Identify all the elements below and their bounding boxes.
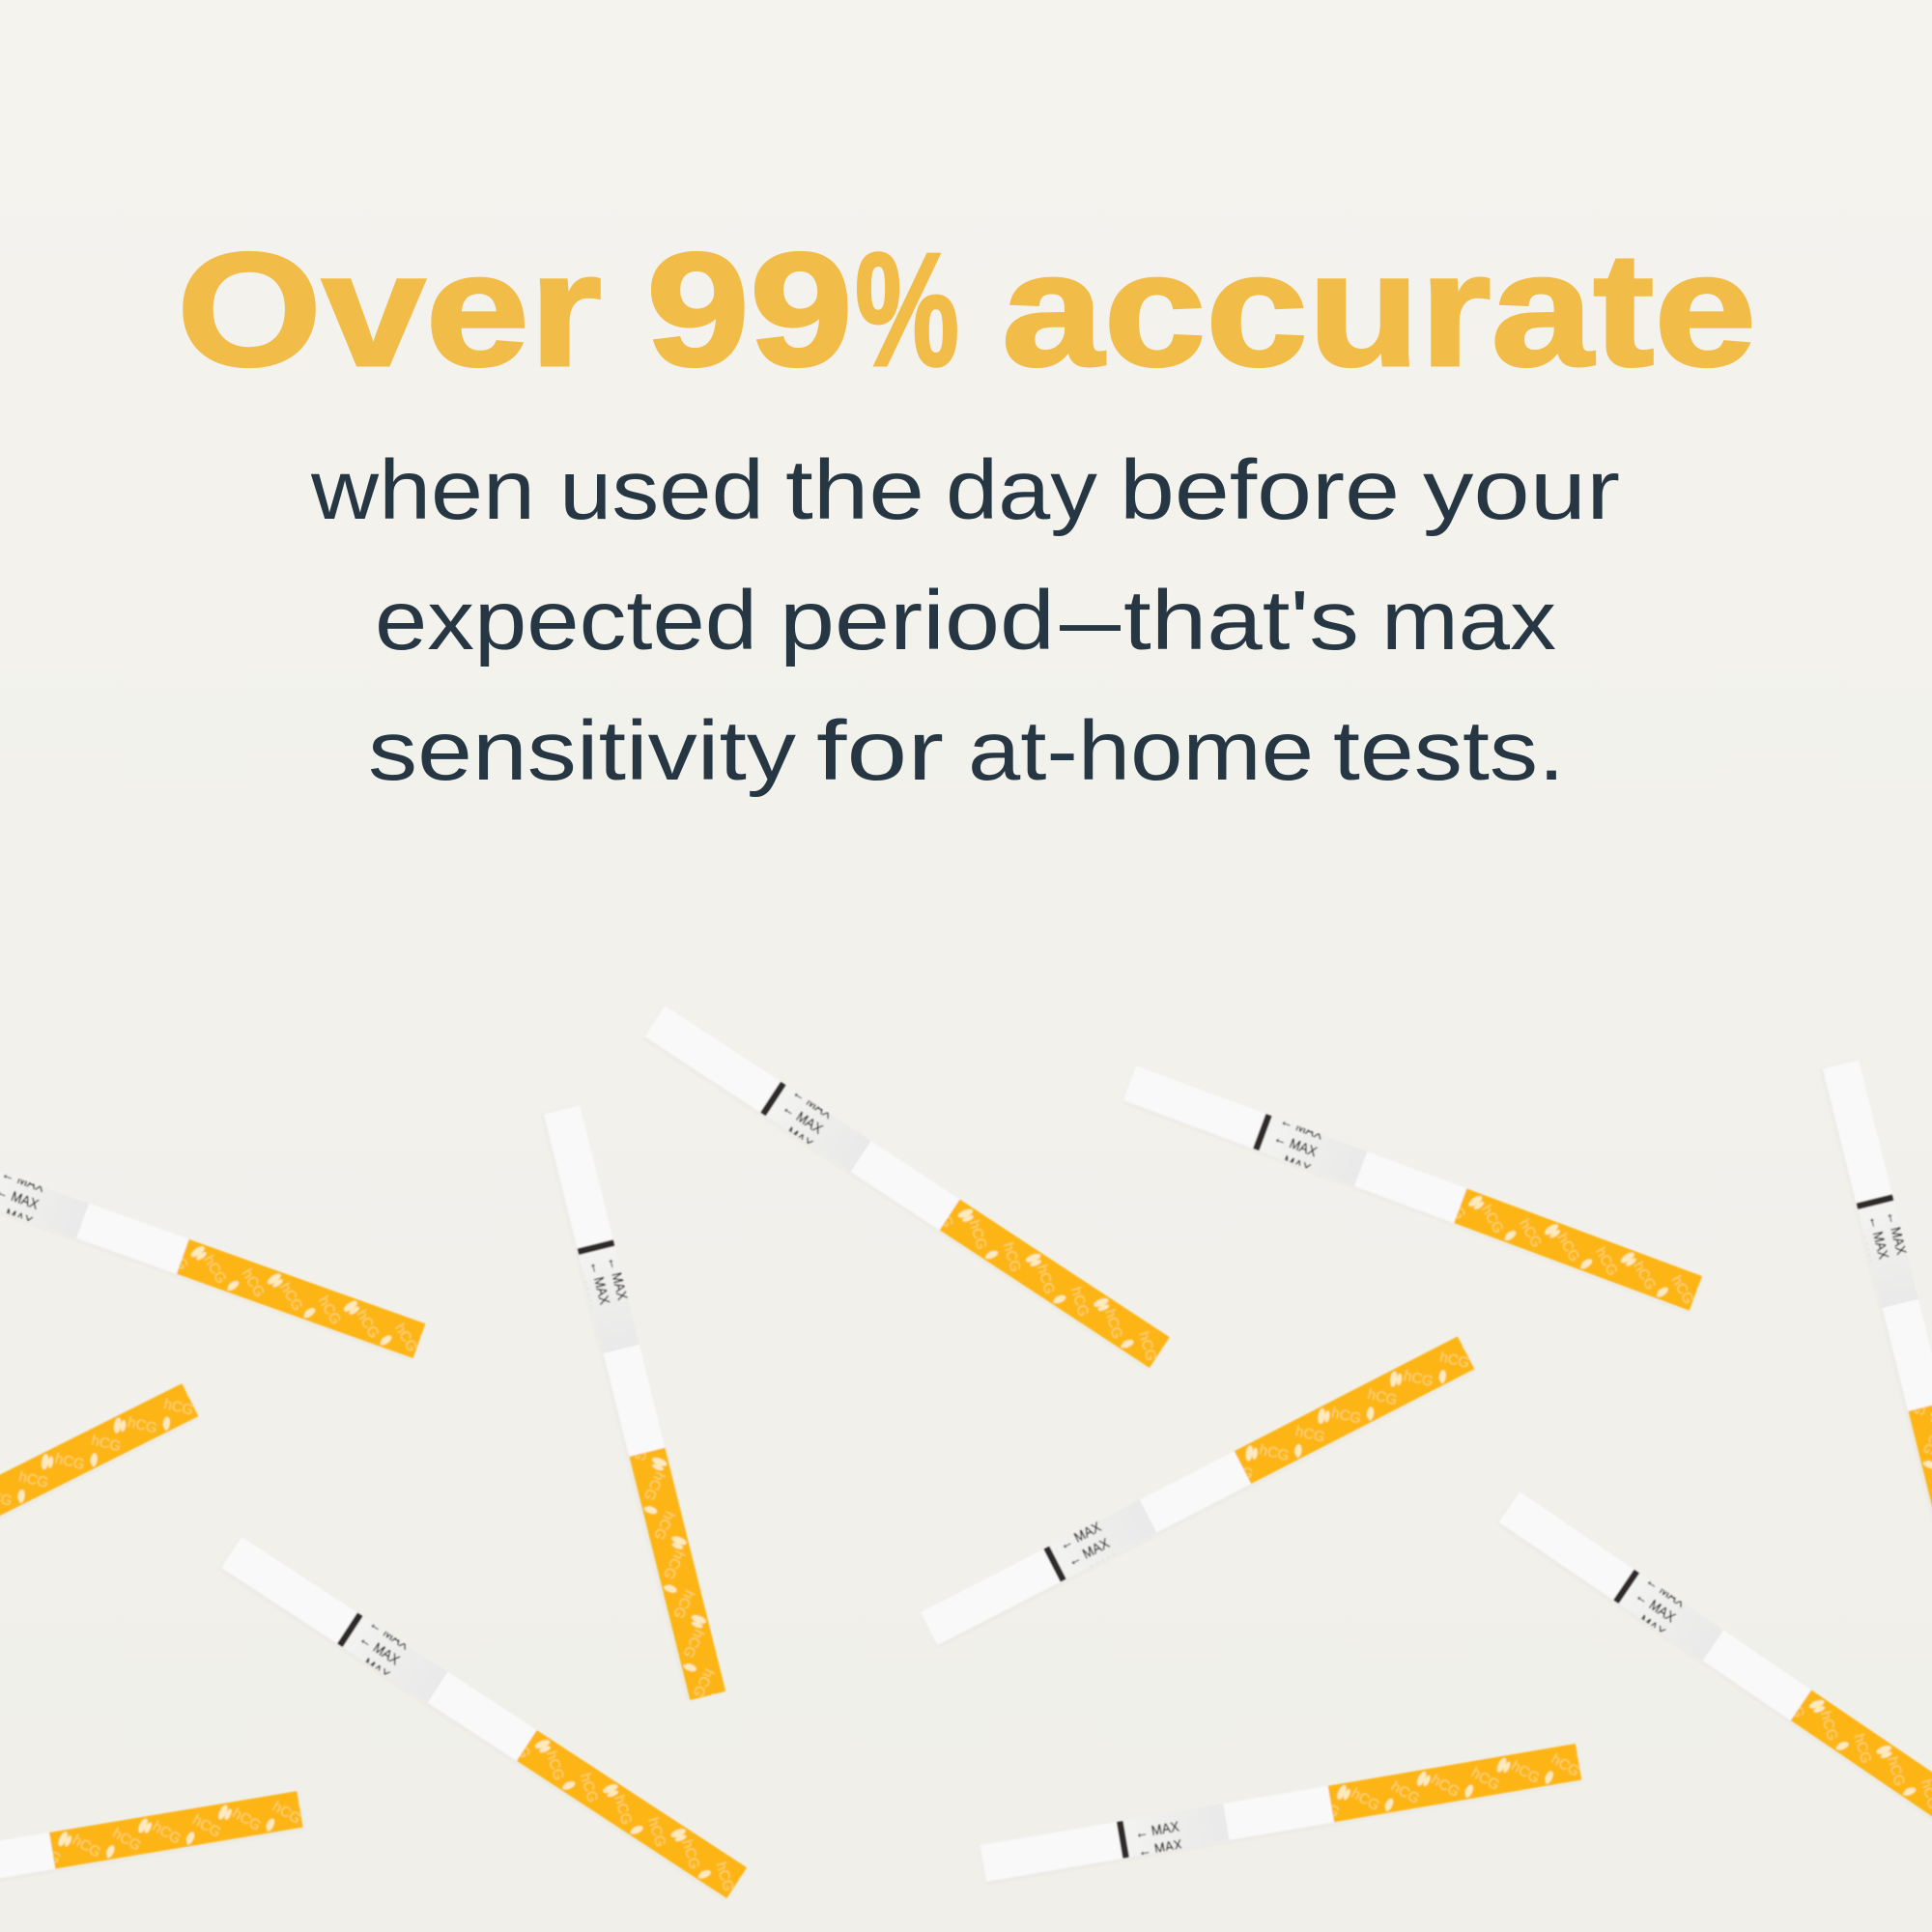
body text <box>310 443 1620 798</box>
body line 1: before <box>1120 443 1400 537</box>
test strip: centre left, steep <box>531 1105 728 1703</box>
test strip: far right: ← MAX <box>1847 1218 1874 1265</box>
body line 1: when <box>310 443 535 537</box>
body line 3: tests. <box>1333 704 1565 798</box>
test strip: top centre: ← MAX <box>789 1084 836 1122</box>
test strip: top centre <box>640 999 1174 1376</box>
test strip: bottom centre: ← MAX <box>1137 1836 1183 1861</box>
test strip: top right <box>1121 1059 1705 1319</box>
body line 2: expected <box>375 574 757 668</box>
test strip: bottom centre: ← MAX <box>1134 1818 1180 1842</box>
test strip: top centre: ← MAX <box>769 1115 815 1153</box>
body line 1: used <box>559 443 764 537</box>
test strip: lower right: ← MAX <box>1622 1603 1668 1641</box>
body line 3 <box>368 704 1565 798</box>
test strip: centre right, rising: ← MAX <box>1073 1551 1121 1586</box>
test strip: far right: ← MAX <box>1865 1214 1891 1261</box>
test strip: centre right, rising: ← MAX <box>1065 1535 1112 1570</box>
body line 1: day <box>946 443 1098 537</box>
body line 2: that's <box>1123 574 1359 668</box>
title: Over <box>177 220 602 400</box>
test strip: left, orange end only <box>0 1383 198 1687</box>
body line 2: max <box>1381 574 1556 668</box>
test strip: upper left: ← MAX <box>0 1165 46 1196</box>
test strip: bottom centre <box>980 1744 1582 1887</box>
test strip: bottom left <box>0 1791 303 1927</box>
title: accurate <box>1002 220 1756 400</box>
test strip: upper left <box>0 1174 427 1359</box>
test strip: lower right: ← MAX <box>1633 1587 1678 1626</box>
body line 1: the <box>785 443 924 537</box>
test strip: top right: ← MAX <box>1265 1147 1313 1178</box>
title: 99 <box>646 220 853 400</box>
test strip: centre left, steep: ← MAX <box>586 1260 612 1306</box>
title: % <box>855 220 959 400</box>
test strip: centre left, steep: ← MAX <box>604 1255 631 1302</box>
body line 2 <box>375 574 1556 668</box>
body line 2: — <box>1060 574 1121 668</box>
test strip: top centre: ← MAX <box>780 1099 826 1138</box>
test strip: lower left centre <box>216 1530 752 1906</box>
body line 3: at-home <box>968 704 1314 798</box>
test strip: lower left centre: ← MAX <box>346 1646 392 1684</box>
title <box>177 220 1756 400</box>
test strip: lower right: ← MAX <box>1642 1573 1689 1611</box>
test strip: centre right, rising: ← MAX <box>1057 1519 1104 1553</box>
body line 2: period <box>780 574 1055 668</box>
test strip: lower right <box>1499 1492 1932 1818</box>
test strip: centre left, steep: ← MAX <box>568 1264 595 1311</box>
test strip: lower left centre: ← MAX <box>356 1631 403 1668</box>
body line 1 <box>310 443 1620 537</box>
test strip: top right: ← MAX <box>1271 1129 1319 1160</box>
test strip: centre right, rising <box>920 1334 1481 1657</box>
test strip: far right <box>1824 1061 1932 1511</box>
body line 1: your <box>1423 443 1620 537</box>
test strip: top right: ← MAX <box>1278 1112 1325 1143</box>
test strip: far right: ← MAX <box>1883 1209 1910 1257</box>
test strip: lower left centre: ← MAX <box>366 1615 412 1653</box>
body line 3: for <box>816 704 944 798</box>
body line 3: sensitivity <box>368 704 797 798</box>
